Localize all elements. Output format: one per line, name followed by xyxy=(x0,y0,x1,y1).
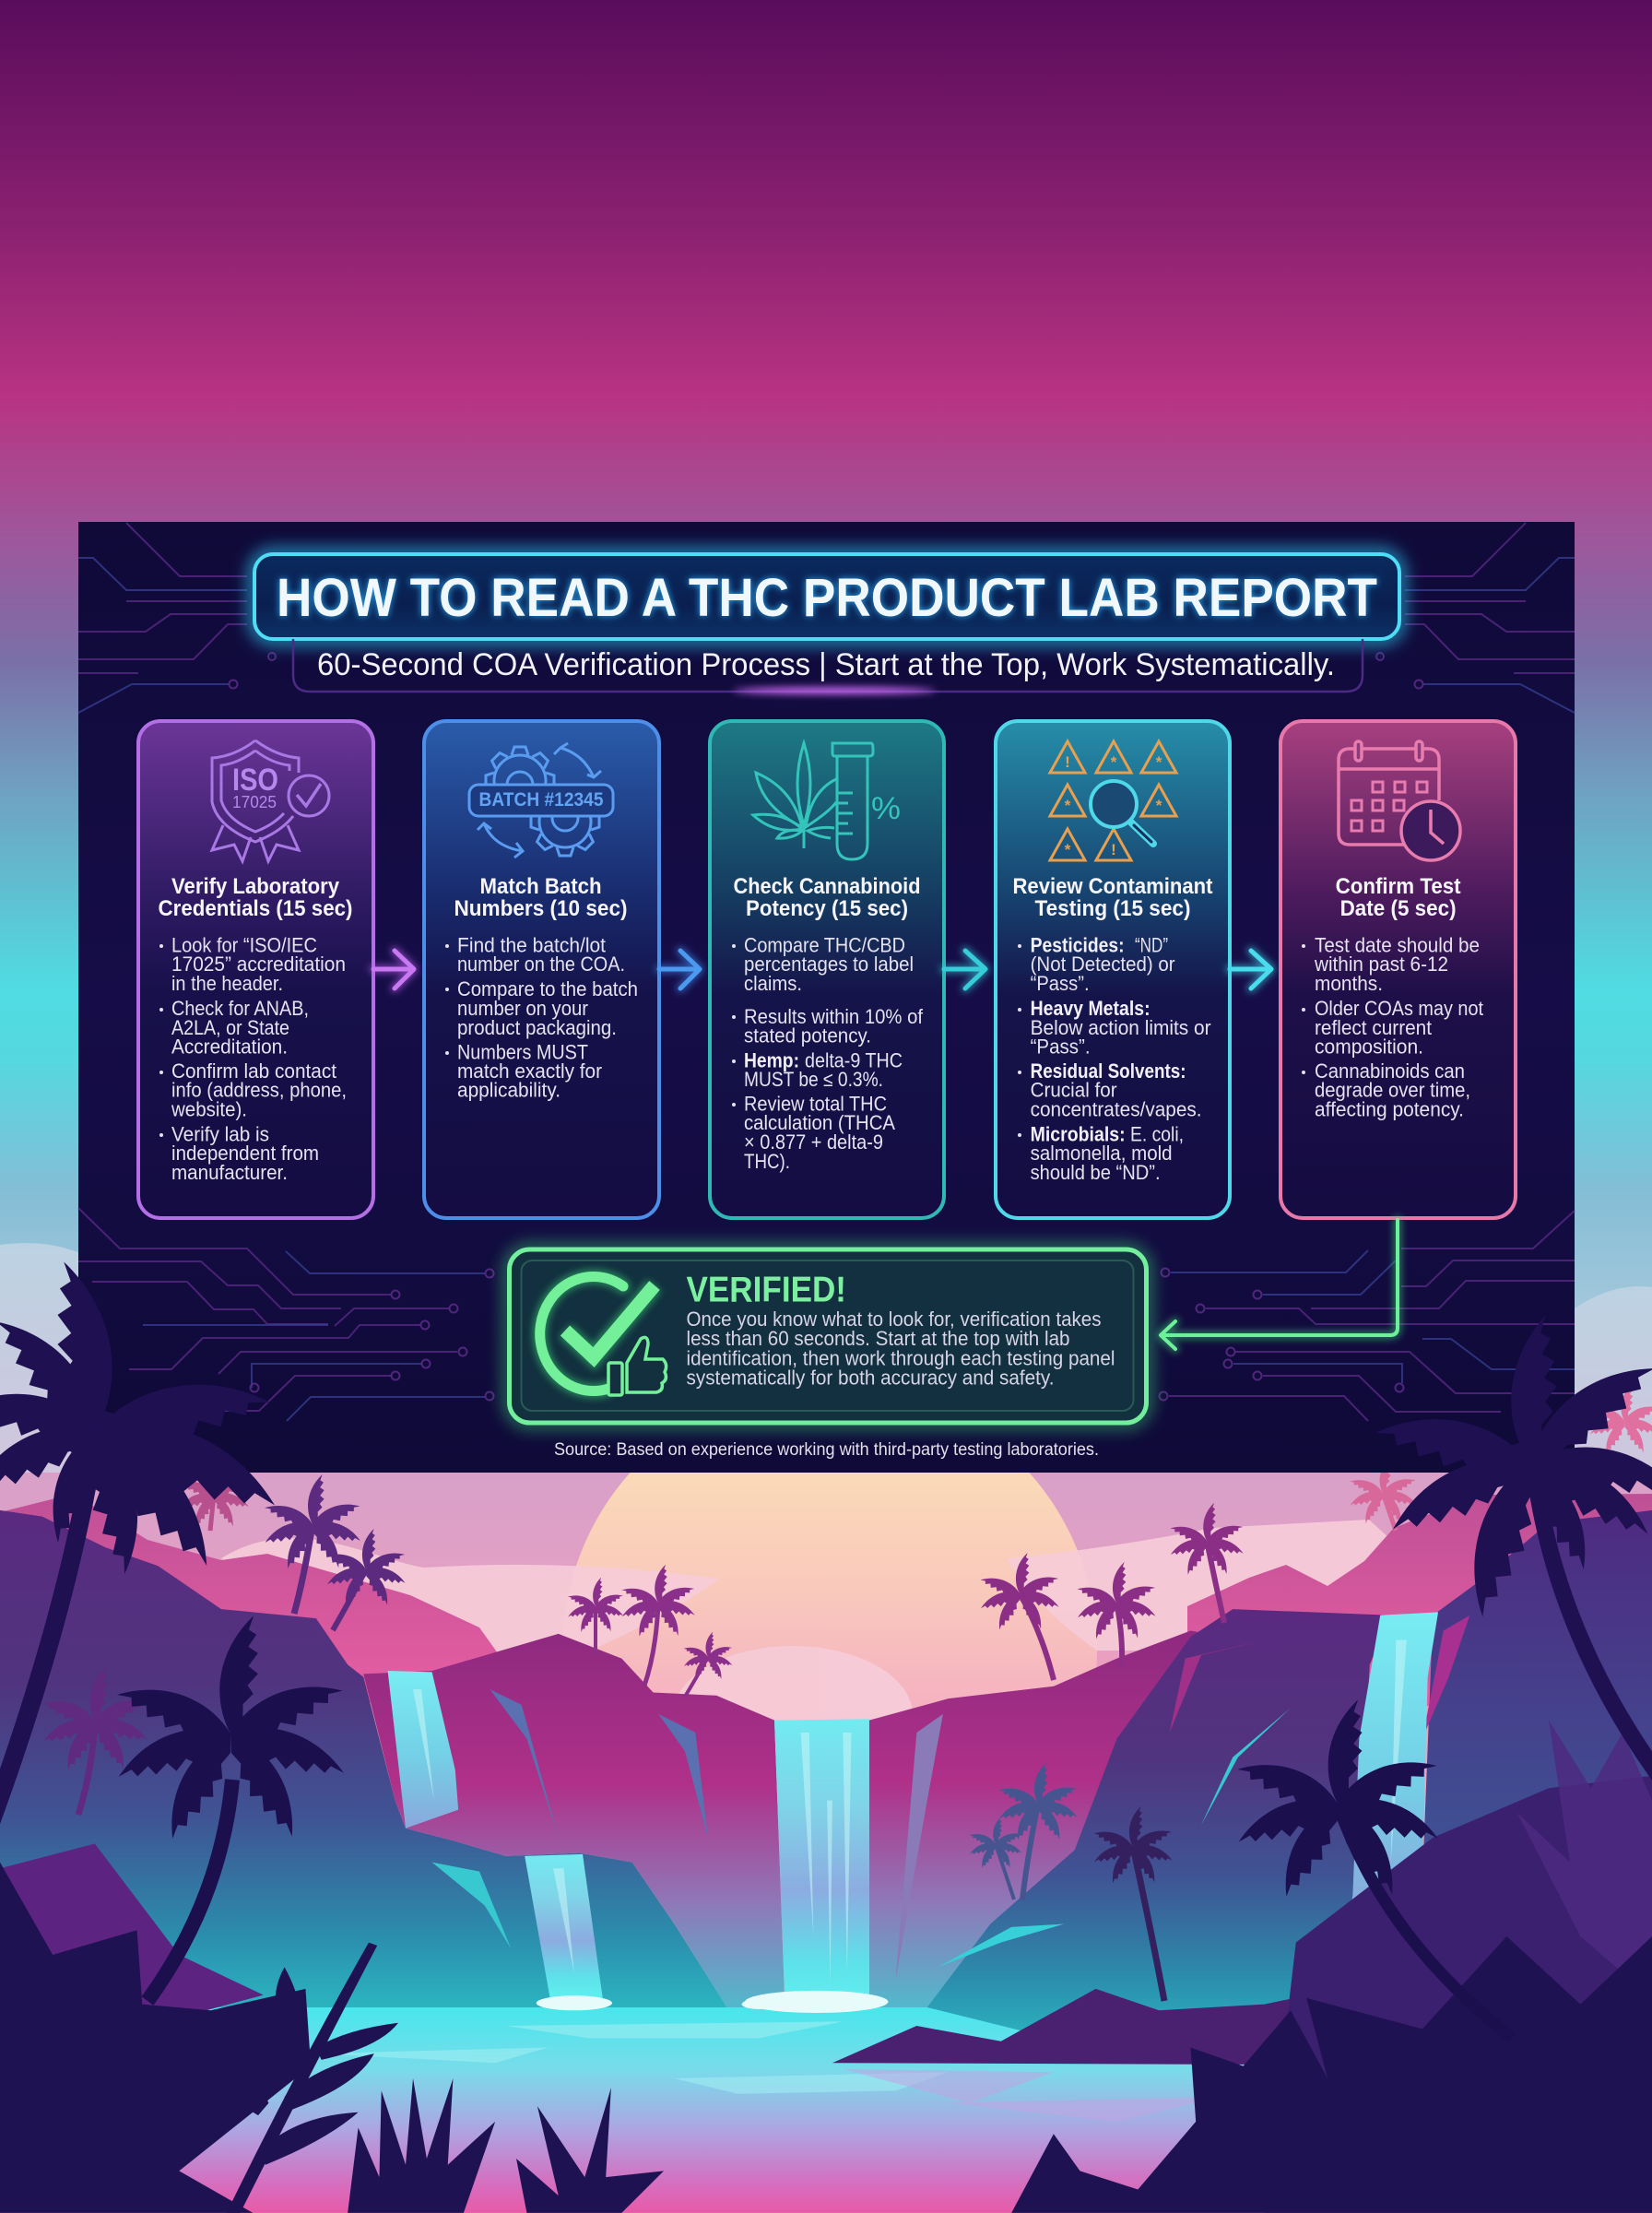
bullets: 17025” accreditation xyxy=(171,953,346,976)
background palms xyxy=(40,1383,1652,2001)
center-left magenta cliff xyxy=(363,1634,785,2007)
body text: identification, then work through each testing panel xyxy=(686,1347,1115,1370)
bullets: within past 6-12 xyxy=(1314,953,1448,976)
heading: Credentials (15 sec) xyxy=(159,896,352,921)
bullets: Compare THC/CBD xyxy=(744,933,905,957)
card 1: verify laboratory credentials xyxy=(138,721,373,1218)
sun xyxy=(562,1383,1097,1918)
bullets: percentages to label xyxy=(744,953,914,976)
right mound xyxy=(1264,1776,1652,2213)
icon: hazard triangles and magnifier: * xyxy=(1065,797,1071,814)
icon: hazard triangles and magnifier: * xyxy=(1156,753,1162,771)
bullets: Results within 10% of xyxy=(744,1005,924,1028)
bullets xyxy=(445,933,638,1102)
bullets: Accreditation. xyxy=(171,1035,288,1059)
clouds beside panel xyxy=(0,1243,1652,1586)
bullets: website). xyxy=(171,1098,247,1121)
icon: verified check and thumbs up xyxy=(540,1276,667,1395)
waterfall streaks xyxy=(413,1640,1407,1986)
icon: cannabis leaf and test tube: % xyxy=(871,791,901,826)
circuit traces xyxy=(78,523,1575,1421)
title glow: HOW TO READ A THC PRODUCT LAB REPORT xyxy=(277,568,1377,628)
body text: systematically for both accuracy and safety. xyxy=(686,1367,1055,1390)
water xyxy=(0,2007,1652,2213)
bullets: match exactly for xyxy=(457,1059,602,1083)
far right cliff xyxy=(1349,1510,1652,2047)
bullets: Cannabinoids can xyxy=(1315,1059,1465,1083)
heading xyxy=(1012,874,1213,921)
bullets: degrade over time, xyxy=(1315,1079,1470,1102)
bullets: THC). xyxy=(744,1150,790,1173)
bullets: “Pass”. xyxy=(1031,1035,1091,1059)
main panel xyxy=(78,522,1575,1473)
center-right magenta cliff xyxy=(869,1630,1244,2007)
arrow: step 1 to 2 xyxy=(373,951,414,988)
right waterfall xyxy=(1351,1612,1438,1918)
bullets: reflect current xyxy=(1315,1016,1432,1039)
large palm right xyxy=(1372,1313,1652,1789)
icon: ISO shield: 17025 xyxy=(232,793,277,811)
bullets: info (address, phone, xyxy=(171,1079,347,1102)
bullets: Check for ANAB, xyxy=(171,997,309,1020)
bullets: Older COAs may not xyxy=(1315,997,1483,1020)
bullets: affecting potency. xyxy=(1315,1098,1464,1121)
waterfall foam xyxy=(537,1991,888,2013)
card 3: check cannabinoid potency xyxy=(710,721,944,1218)
island rock xyxy=(832,1924,1652,2066)
bullets: Residual Solvents: xyxy=(1031,1059,1186,1083)
bullets: E. coli, xyxy=(1130,1123,1184,1145)
body text xyxy=(686,1308,1115,1390)
bullets: manufacturer. xyxy=(171,1161,288,1184)
bullets: composition. xyxy=(1315,1035,1423,1059)
heading: Match Batch xyxy=(479,874,601,899)
bullets: Verify lab is xyxy=(171,1123,269,1145)
bullets: Compare to the batch xyxy=(457,977,638,1000)
bullets xyxy=(159,933,347,1184)
bullets: Crucial for xyxy=(1031,1079,1117,1102)
icon: calendar and clock xyxy=(1339,741,1460,860)
title box xyxy=(254,554,1399,639)
heading: Numbers (10 sec) xyxy=(454,896,627,921)
card 2: match batch numbers xyxy=(424,721,659,1218)
heading xyxy=(1336,874,1461,921)
icon: ISO shield xyxy=(212,740,329,861)
bullets: in the header. xyxy=(171,972,283,995)
heading: Confirm Test xyxy=(1336,874,1461,899)
bullets: delta-9 THC xyxy=(805,1049,903,1071)
icon: hazard triangles and magnifier xyxy=(1050,741,1176,860)
bullets: Microbials: xyxy=(1031,1123,1126,1145)
right foliage xyxy=(1011,1936,1652,2213)
bullets: Below action limits or xyxy=(1031,1016,1211,1039)
bullets: independent from xyxy=(171,1142,319,1165)
icon: gears and batch label xyxy=(469,743,613,858)
right cliff xyxy=(927,1609,1391,2041)
bullets: months. xyxy=(1315,972,1383,995)
card 5: confirm test date xyxy=(1280,721,1516,1218)
heading xyxy=(159,874,352,921)
card 4: review contaminant testing xyxy=(996,721,1230,1218)
bullets: Pesticides: xyxy=(1031,933,1125,957)
bullets: applicability. xyxy=(457,1079,560,1102)
title: HOW TO READ A THC PRODUCT LAB REPORT xyxy=(277,568,1377,628)
bullets xyxy=(732,933,924,1173)
arrow: step 2 to 3 xyxy=(659,951,700,988)
left lower waterfall xyxy=(525,1854,603,1998)
bullets: calculation (THCA xyxy=(744,1111,895,1134)
icon: hazard triangles and magnifier: * xyxy=(1156,797,1162,814)
bullets: × 0.877 + delta-9 xyxy=(744,1130,883,1154)
heading: Check Cannabinoid xyxy=(734,874,920,899)
heading: VERIFIED! xyxy=(686,1271,846,1310)
bullets: claims. xyxy=(744,972,802,995)
bullets: Find the batch/lot xyxy=(457,933,606,957)
grass clumps xyxy=(348,2078,664,2213)
bullets: stated potency. xyxy=(744,1024,871,1047)
arrow: step 4 to 5 xyxy=(1230,951,1271,988)
bullets: concentrates/vapes. xyxy=(1031,1098,1202,1121)
heading xyxy=(734,874,920,921)
bullets: Test date should be xyxy=(1315,933,1480,957)
left cliff xyxy=(0,1510,727,2007)
heading: Potency (15 sec) xyxy=(746,896,908,921)
subtitle: 60-Second COA Verification Process | Start at the Top, Work Systematically. xyxy=(317,647,1335,682)
midground palm left xyxy=(112,1612,350,2001)
bullets: product packaging. xyxy=(457,1016,617,1039)
bullets: A2LA, or State xyxy=(171,1016,289,1039)
left upper waterfall xyxy=(388,1671,458,1828)
icon: ISO shield: ISO xyxy=(232,763,278,798)
bullets: salmonella, mold xyxy=(1031,1142,1173,1165)
body text: Once you know what to look for, verification takes xyxy=(686,1308,1101,1331)
bullets: number on the COA. xyxy=(457,953,625,976)
source note: Source: Based on experience working with third-party testing laboratories. xyxy=(554,1440,1099,1460)
lower left hill xyxy=(0,1844,264,2047)
heading: Verify Laboratory xyxy=(171,874,340,899)
heading: Testing (15 sec) xyxy=(1034,896,1191,921)
bullets: Numbers MUST xyxy=(457,1041,588,1064)
icon: hazard triangles and magnifier: ! xyxy=(1111,841,1116,858)
subtitle box xyxy=(293,639,1363,694)
bullets: Hemp: xyxy=(744,1049,799,1071)
midground palm right xyxy=(1233,1697,1512,2038)
icon: hazard triangles and magnifier: * xyxy=(1065,841,1071,858)
verified callout xyxy=(509,1249,1147,1423)
bullets: (Not Detected) or xyxy=(1031,953,1175,976)
landscape: waterfall scene xyxy=(0,1383,1652,2213)
bullets xyxy=(1018,933,1211,1184)
right fern xyxy=(1517,1721,1652,1998)
icon: hazard triangles and magnifier: ! xyxy=(1065,753,1070,771)
arrow: step 3 to 4 xyxy=(944,951,985,988)
heading xyxy=(454,874,627,921)
foreground jungle silhouettes xyxy=(0,1257,1652,2213)
bullets: should be “ND”. xyxy=(1031,1161,1161,1184)
center waterfall xyxy=(774,1719,869,2005)
arrow: step 5 to verified xyxy=(1161,1220,1398,1349)
icon: hazard triangles and magnifier: * xyxy=(1111,753,1117,771)
large palm left xyxy=(0,1257,288,1835)
leaf branch xyxy=(200,1943,398,2213)
heading: Review Contaminant xyxy=(1012,874,1213,899)
rock highlights xyxy=(432,1615,1469,1980)
bullets xyxy=(1302,933,1483,1121)
icon: gears and batch label: BATCH #12345 xyxy=(479,789,604,811)
heading: Date (5 sec) xyxy=(1340,896,1457,921)
bullets: Review total THC xyxy=(744,1093,887,1116)
bullets: Look for “ISO/IEC xyxy=(171,933,317,957)
left foliage xyxy=(0,1863,311,2213)
bullets: Confirm lab contact xyxy=(171,1059,336,1083)
icon: cannabis leaf and test tube xyxy=(753,743,901,859)
distant pink hills xyxy=(0,1494,1652,1706)
bullets: MUST be ≤ 0.3%. xyxy=(744,1068,883,1091)
water highlights xyxy=(316,2021,949,2094)
bullets: “Pass”. xyxy=(1031,972,1090,995)
pale clouds xyxy=(221,1520,1401,1784)
bullets: Heavy Metals: xyxy=(1031,997,1150,1020)
body text: less than 60 seconds. Start at the top with lab xyxy=(686,1327,1069,1350)
bullets: number on your xyxy=(457,997,588,1020)
bullets: “ND” xyxy=(1135,933,1168,957)
